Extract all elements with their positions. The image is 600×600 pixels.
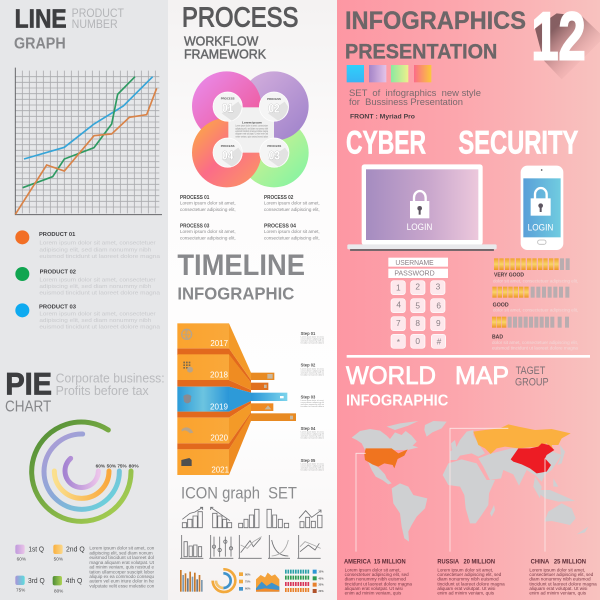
icons: colored area chart <box>256 573 279 592</box>
text block: set description: for Bussiness Presentation <box>349 97 463 107</box>
legend item: product 01: Lorem ipsum dolor sit amet, consectetuer <box>39 241 156 247</box>
panel: left column background <box>0 0 168 600</box>
text block: America: AMERICA 15 MILLION <box>344 560 406 566</box>
legend item: product 02: euismod tincidunt ut laoreet dolore magna <box>39 291 161 297</box>
text block: process 03: consectetuer adipiscing elit, <box>180 235 236 240</box>
keypad: 0 <box>415 336 420 346</box>
legend item: product 03: PRODUCT 03 <box>39 304 77 310</box>
text block: pie description: tation ullamcorper suscipit lobor <box>89 569 154 574</box>
rating: bad: BAD <box>492 334 503 340</box>
block: 2021 <box>177 412 251 475</box>
node: 03: PROCESS <box>267 144 281 148</box>
rating: very good: VERY GOOD <box>494 273 524 279</box>
text block: process 04: PROCESS 04 <box>264 223 296 229</box>
node: 03: 03 <box>269 148 280 162</box>
subheading: workflow framework <box>184 33 266 62</box>
block: 2017: 2017 <box>210 338 228 348</box>
text block: step 03: sed diam nonummy nibh eu <box>301 404 324 406</box>
text block: China: consectetuer adipiscing elit, sed <box>529 572 594 577</box>
icons: donut legend: 75% <box>245 579 251 583</box>
text block: step 02 <box>301 363 325 376</box>
panel: world map <box>344 355 597 596</box>
icons: colored donut <box>213 569 235 592</box>
text block: step 03: Lorem ipsum dolor sit amet, <box>301 399 324 402</box>
circle: orange <box>192 118 261 187</box>
icons: donut legend: 80% <box>245 572 251 576</box>
keypad: 7 <box>396 318 401 328</box>
keypad: 8 <box>415 318 420 328</box>
text block: step 02: Step 02 <box>301 363 316 368</box>
text block: America: tincidunt ut laoreet dolore magna <box>345 581 413 586</box>
icons: outline row 2 <box>180 535 321 558</box>
icons: people legend: 20% <box>318 589 324 593</box>
text block: Russia: RUSSIA 20 MILLION <box>437 560 495 566</box>
map: USA highlight <box>364 448 408 468</box>
text block: Russia: consectetuer adipiscing elit, sed <box>437 572 502 577</box>
login fields <box>388 258 448 278</box>
heading: INFOGRAPHIC: INFOGRAPHIC <box>177 283 294 303</box>
text block: China <box>529 560 597 596</box>
login fields: USERNAME <box>395 258 434 267</box>
heading: INFOGRAPHICS: INFOGRAPHICS <box>345 7 526 35</box>
text block: step 01: Step 01 <box>301 331 316 336</box>
heading: infographic: INFOGRAPHIC <box>346 392 448 409</box>
node: 04: PROCESS <box>221 144 235 148</box>
node: 04 <box>213 138 242 167</box>
subheading: target group: TAGET <box>516 365 546 377</box>
text block: Russia: diam nonummy nibh euismod <box>437 577 499 582</box>
timeline bars <box>251 373 296 421</box>
text block: China: tincidunt ut laoreet dolore magna <box>529 581 597 586</box>
text block: process 04 <box>264 223 320 240</box>
keypad: 6 <box>436 300 441 310</box>
text block: process 04: Lorem ipsum dolor sit amet, <box>264 229 320 234</box>
icons: people legend <box>313 570 324 593</box>
text block: step 02: consectetuer adipiscing elit <box>301 369 324 372</box>
circle: purple <box>239 71 309 141</box>
chart value labels: 60% <box>96 463 105 468</box>
node: 03 <box>260 138 289 167</box>
icon: phone lock <box>531 188 551 216</box>
node: 01: PROCESS <box>221 96 235 100</box>
legend item: product 03: adipiscing elit, sed diam nonummy nibh <box>39 318 151 324</box>
icons: people legend: 40% <box>318 576 324 580</box>
icons: colored bar chart <box>180 570 203 592</box>
text block: set description: SET of infographics new style <box>349 88 481 98</box>
text block: step 02: Lorem ipsum dolor sit amet, <box>301 367 324 370</box>
login fields: PASSWORD <box>394 269 435 278</box>
text block: pie description: vulputate velit esse molestie con <box>89 584 155 589</box>
center card: adipiscing elit, sed diam nonummy nibh <box>235 127 269 130</box>
text block: process 02 <box>264 195 320 212</box>
legend item: product 03 <box>15 303 161 331</box>
keypad: * <box>397 337 401 347</box>
rating: good: GOOD <box>493 302 509 308</box>
text block: step 01: sed diam nonummy nibh eu <box>301 341 324 343</box>
subheading: corporate business: Profits before tax <box>56 383 149 398</box>
keypad: 4 <box>396 300 401 310</box>
center card: minim veniam, quis nostrud exerci tation <box>235 135 269 138</box>
text block: step 02: tincidunt ut laoreet dolore <box>301 373 325 376</box>
heading: PRESENTATION: PRESENTATION <box>345 40 497 63</box>
rating: bad <box>492 317 579 351</box>
subheading: workflow framework: FRAMEWORK <box>184 47 266 62</box>
diagram: four-circle workflow <box>192 71 309 187</box>
heading: GRAPH: GRAPH <box>14 36 66 53</box>
text block: process 01 <box>180 195 236 212</box>
smartphone <box>521 166 563 250</box>
text block: step 03: tincidunt ut laoreet dolore <box>301 405 325 408</box>
text block: step 05: sed diam nonummy nibh eu <box>301 468 324 470</box>
text block: process 04: consectetuer adipiscing elit, <box>264 235 320 240</box>
node: 02: 02 <box>268 102 280 116</box>
text block: pie description: ad minim veniam, quis nostrud e <box>89 565 154 570</box>
text block: China: Lorem ipsum dolor sit amet, <box>529 567 585 572</box>
map: China highlight <box>511 443 554 473</box>
center card: euismod tincidunt ut laoreet dolore magna <box>235 130 269 133</box>
center card: aliquam erat volutpat. Ut wisi enim ad <box>235 133 269 136</box>
text block: process 03: PROCESS 03 <box>180 223 209 229</box>
laptop: LOGIN <box>407 222 432 232</box>
subheading: corporate business: Corporate business: <box>56 370 165 385</box>
text block: process 02: PROCESS 02 <box>264 195 293 201</box>
keypad: 2 <box>415 282 420 292</box>
legend item: product 02: PRODUCT 02 <box>40 269 77 275</box>
panel: middle column background <box>168 0 337 600</box>
icons: people legend: 30% <box>318 583 324 587</box>
legend: products <box>15 230 161 331</box>
center card: Lorem ipsum dolor sit amet, consectetuer <box>235 125 268 128</box>
legend: quarters <box>15 544 85 593</box>
legend: quarters: 1st Q <box>28 544 44 553</box>
text block: set description <box>349 88 481 107</box>
block: 2020 <box>177 401 251 443</box>
block: 2019 <box>177 387 251 412</box>
leader lines <box>356 428 545 552</box>
chart value labels <box>96 463 139 468</box>
text block: pie description: adipiscing elit, sed diam nonum <box>89 550 153 555</box>
legend item: product 01 <box>15 230 161 260</box>
subheading: product number <box>72 6 124 31</box>
heading: icon graph set: ICON graph SET <box>181 483 297 502</box>
block: 2019: 2019 <box>210 401 228 411</box>
text block: pie description: euismod tincidunt ut laoreet dol <box>89 555 154 560</box>
keypad: 1 <box>396 282 401 292</box>
panel: process <box>180 2 320 240</box>
chart: timeline blocks <box>177 323 296 475</box>
block: 2017 <box>177 323 251 383</box>
legend: quarters: 75% <box>16 587 25 592</box>
legend: quarters: 2nd Q <box>66 544 85 553</box>
keypad <box>391 281 446 348</box>
keypad: 5 <box>415 300 420 310</box>
circle: green <box>239 118 309 187</box>
text block: step 02: sed diam nonummy nibh eu <box>301 372 324 374</box>
text block: step 05: consectetuer adipiscing elit <box>301 465 324 468</box>
rating: good <box>492 287 578 313</box>
panel: presentation header <box>345 0 600 161</box>
legend item: product 03: Lorem ipsum dolor sit amet, consectetuer <box>39 311 156 317</box>
text block: step 01: consectetuer adipiscing elit <box>301 338 324 341</box>
text block: China: aliquam erat volutpat. Ut wisi <box>529 586 587 591</box>
legend item: product 01: adipiscing elit, sed diam nonummy nibh <box>39 247 151 253</box>
node: 02 <box>259 92 289 121</box>
keypad: 3 <box>436 282 441 292</box>
text block: America: enim ad minim veniam, quis <box>345 591 402 596</box>
panel: line graph <box>14 3 162 331</box>
text block: America: Lorem ipsum dolor sit amet, <box>345 567 401 572</box>
block: 2020: 2020 <box>210 432 228 442</box>
text block: step 04: tincidunt ut laoreet dolore <box>301 437 325 440</box>
panel: icon graph set <box>180 483 324 593</box>
icons: donut legend: 60% <box>245 587 251 591</box>
text block: America: aliquam erat volutpat. Ut wisi <box>345 586 403 591</box>
text block: step 03: Step 03 <box>301 394 316 399</box>
legend: quarters: 50% <box>54 557 63 562</box>
heading: LINE: LINE <box>15 3 67 33</box>
text block: China: diam nonummy nibh euismod <box>529 577 591 582</box>
font note: FRONT : Myriad Pro <box>350 114 415 121</box>
text block: Russia <box>437 560 505 596</box>
subheading: corporate business <box>56 370 165 398</box>
text block: step 03 <box>301 394 325 408</box>
node: 01: 01 <box>222 101 234 115</box>
panel: cyber security <box>347 164 579 351</box>
panel: right column background <box>337 0 600 600</box>
text block: process 03: Lorem ipsum dolor sit amet, <box>180 229 236 234</box>
block: 2021: 2021 <box>211 465 229 475</box>
map: world <box>352 421 588 552</box>
chart value labels: 75% <box>117 463 127 468</box>
icons: people legend: 10% <box>318 570 324 574</box>
icons: colored people grid <box>285 572 309 590</box>
text block: process 02: Lorem ipsum dolor sit amet, <box>264 201 320 206</box>
map: Russia highlight <box>473 424 571 454</box>
laptop <box>347 164 497 251</box>
text block: step 03: consectetuer adipiscing elit <box>301 401 324 404</box>
chart: line graph plot <box>15 68 162 215</box>
heading: world: WORLD <box>346 362 436 390</box>
legend: quarters: 60% <box>17 557 26 562</box>
center card: Lorem ipsum <box>242 120 262 124</box>
panel: timeline <box>177 249 325 475</box>
text block: step 01: tincidunt ut laoreet dolore <box>301 342 325 345</box>
subheading: target group <box>515 365 549 388</box>
subheading: workflow framework: WORKFLOW <box>184 33 259 48</box>
text block: process 01: Lorem ipsum dolor sit amet, <box>180 201 236 206</box>
chart value labels: 50% <box>107 463 116 468</box>
text block: China: enim ad minim veniam, quis <box>529 591 587 596</box>
text block: America <box>344 560 413 596</box>
color swatches <box>347 65 431 82</box>
smartphone: LOGIN <box>528 223 553 233</box>
chart value labels: 80% <box>129 463 139 468</box>
heading: cyber: CYBER <box>346 124 426 161</box>
heading: CHART: CHART <box>5 399 52 416</box>
text block: step 01: Lorem ipsum dolor sit amet, <box>301 336 324 339</box>
text block: Russia: Lorem ipsum dolor sit amet, <box>437 567 493 572</box>
text block: process 01: PROCESS 01 <box>180 195 209 201</box>
icons: outline row 1 <box>182 507 322 528</box>
text block: process 03 <box>180 223 236 240</box>
text block: Russia: tincidunt ut laoreet dolore magna <box>437 581 505 586</box>
chart: radial rings <box>32 422 131 521</box>
text block: pie description <box>89 546 155 589</box>
circle: pink <box>192 71 261 141</box>
heading: PROCESS: PROCESS <box>182 2 298 33</box>
text block: step 05 <box>301 458 325 472</box>
text block: step 04: sed diam nonummy nibh eu <box>301 436 324 438</box>
rating: very good <box>493 258 578 283</box>
rating: very good: dolor sit amet, consectetuer adipiscing elit, <box>493 278 578 283</box>
bar icons <box>264 374 293 419</box>
text block: step 01 <box>301 331 325 345</box>
text block: America: diam nonummy nibh euismod <box>345 577 407 582</box>
heading: map: MAP <box>455 362 509 390</box>
text block: step 04: consectetuer adipiscing elit <box>301 433 324 436</box>
icons: donut legend <box>239 572 251 591</box>
text block: China: CHINA 25 MILLION <box>531 560 586 566</box>
text block: Russia: enim ad minim veniam, quis <box>437 591 495 596</box>
legend item: product 01: euismod tincidunt ut laoreet dolore magna <box>39 254 161 260</box>
text block: pie description: Lorem ipsum dolor sit amet, con <box>89 546 155 551</box>
legend: quarters: 4th Q <box>66 576 83 585</box>
icon: laptop lock <box>410 191 429 218</box>
heading: TIMELINE: TIMELINE <box>177 249 305 282</box>
keypad: 9 <box>436 318 441 328</box>
subheading: target group: GROUP <box>515 376 549 388</box>
node: 04: 04 <box>222 148 234 162</box>
legend item: product 02 <box>15 267 161 297</box>
text block: pie description: aliquip ex ea commodo consequ <box>89 574 154 579</box>
subheading: product number: PRODUCT <box>72 6 124 20</box>
text block: process 02: consectetuer adipiscing elit, <box>264 207 320 212</box>
text block: step 05: Lorem ipsum dolor sit amet, <box>301 463 324 466</box>
legend item: product 03: euismod tincidunt ut laoreet dolore magna <box>39 325 161 331</box>
text block: Russia: aliquam erat volutpat. Ut wisi <box>437 586 495 591</box>
text block: pie description: magna aliquam erat volutpat. Ut <box>89 560 155 565</box>
node: 02: PROCESS <box>267 97 281 101</box>
text block: pie description: autem vel eum iriure dolor in he <box>89 579 154 584</box>
map: continents <box>352 421 588 542</box>
block: 2018: 2018 <box>210 370 228 380</box>
legend: quarters: 80% <box>54 588 63 593</box>
text block: step 04: Lorem ipsum dolor sit amet, <box>301 431 324 434</box>
rating: bad: euismod tincidunt ut laoreet dolore magna <box>492 346 579 351</box>
center card <box>228 107 274 153</box>
text block: process 01: consectetuer adipiscing elit, <box>180 207 236 212</box>
block: 2018 <box>177 354 251 393</box>
text block: step 05: tincidunt ut laoreet dolore <box>301 469 325 472</box>
heading: PIE: PIE <box>5 366 52 401</box>
text block: America: consectetuer adipiscing elit, sed <box>345 572 409 577</box>
legend item: product 01: PRODUCT 01 <box>39 232 76 238</box>
text block: step 04 <box>301 426 325 440</box>
node: 01 <box>213 92 242 121</box>
legend item: product 02: Lorem ipsum dolor sit amet, consectetuer <box>39 277 156 283</box>
legend: quarters: 3rd Q <box>28 576 45 585</box>
rating: good: dolor sit amet, consectetuer adipiscing elit, <box>493 308 578 313</box>
text block: step 05: Step 05 <box>301 458 316 463</box>
text block: step 04: Step 04 <box>301 426 316 431</box>
subheading: product number: NUMBER <box>72 17 118 31</box>
legend item: product 02: adipiscing elit, sed diam nonummy nibh <box>39 284 151 290</box>
rating: bad: dolor sit amet, consectetuer adipiscing elit, <box>492 340 578 345</box>
keypad: # <box>437 336 442 346</box>
panel: pie chart <box>5 366 165 593</box>
